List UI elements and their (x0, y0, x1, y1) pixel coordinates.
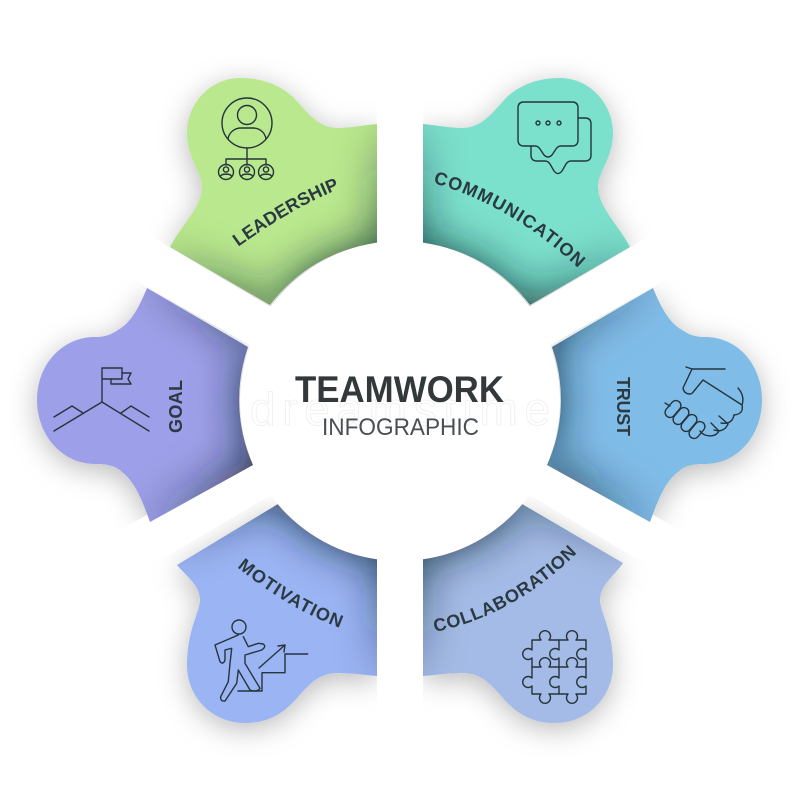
subtitle: INFOGRAPHIC (322, 414, 479, 441)
label: communication: COMMUNICATION (435, 172, 586, 268)
icon: puzzle (523, 631, 586, 703)
panel: collaboration (423, 504, 623, 723)
panel: communication (423, 78, 630, 305)
label: trust: TRUST (617, 377, 630, 436)
icon: leader with team (218, 98, 274, 180)
panel: leadership (170, 78, 377, 305)
label: motivation: MOTIVATION (238, 558, 344, 628)
icon: person climbing stairs (215, 620, 308, 701)
panel: trust (547, 288, 762, 522)
center circle with title (240, 241, 560, 561)
panel: goal (37, 288, 253, 522)
panel: motivation (177, 504, 377, 723)
title: TEAMWORK (295, 369, 504, 410)
label: goal: GOAL (169, 380, 182, 432)
icon: flag on mountain (54, 368, 149, 431)
label: leadership: LEADERSHIP (232, 179, 336, 246)
label: collaboration: COLLABORATION (434, 544, 576, 631)
icon: handshake (663, 367, 743, 440)
icon: speech bubbles (518, 102, 591, 174)
center circle with title: dreamstime (250, 383, 550, 435)
